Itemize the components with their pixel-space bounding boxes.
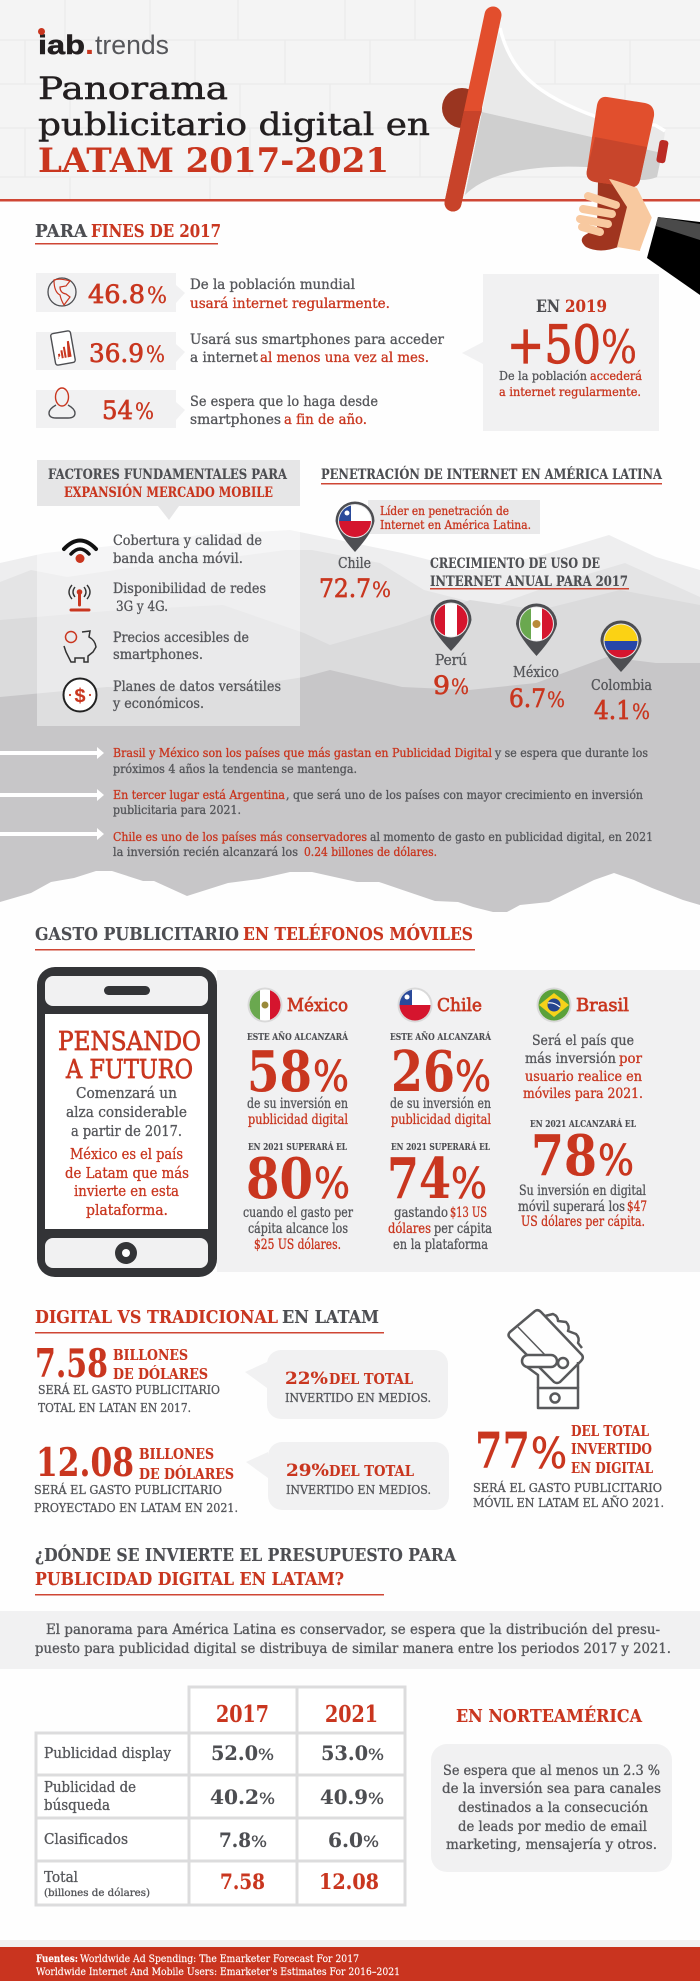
map pin and stat: perú: % <box>451 675 469 699</box>
table: distribución del presupuesto: % <box>258 1745 274 1764</box>
column: chile: Chile <box>437 995 482 1016</box>
stat row: 36.9%: % <box>146 343 165 368</box>
panel: en norteamérica: EN NORTEAMÉRICA <box>456 1704 643 1727</box>
phone: pensando a futuro: de Latam que más <box>65 1164 189 1182</box>
heading: crecimiento de uso: CRECIMIENTO DE USO DE <box>430 556 600 572</box>
table: distribución del presupuesto: Clasificados <box>44 1832 128 1848</box>
panel: factores fundamentales: smartphones. <box>113 647 203 663</box>
table: distribución del presupuesto: Publicidad display <box>44 1746 172 1762</box>
panel: en 2019 <box>462 274 659 431</box>
column: méxico: $25 US dólares. <box>254 1237 341 1253</box>
panel: factores fundamentales: Planes de datos versátiles <box>113 679 281 695</box>
table: distribución del presupuesto: 7.58 <box>220 1869 265 1894</box>
panel: country stats background <box>217 970 700 1272</box>
stat row: 46.8%: 46.8 <box>88 280 145 309</box>
callout: líder en penetración: Líder en penetración de <box>380 503 509 518</box>
stat: 7.58 billones: DE DÓLARES <box>113 1365 208 1383</box>
section heading: digital vs tradicional: DIGITAL VS TRADICIONAL <box>35 1307 278 1328</box>
panel: factores fundamentales: Precios accesibles de <box>113 630 249 646</box>
stat row: 36.9%: 36.9 <box>89 339 144 368</box>
stat: 12.08 billones: BILLONES <box>139 1445 214 1463</box>
icon: hand holding phone <box>508 1310 583 1408</box>
title: Panorama <box>38 71 228 107</box>
column: chile: 74 <box>387 1146 451 1212</box>
map pin and stat: méxico: México <box>513 663 559 681</box>
stat: 77% del total invertido en digital: SERÁ EL GASTO PUBLICITARIO <box>473 1480 662 1495</box>
icon: smartphone with bars <box>50 331 76 365</box>
table: distribución del presupuesto: 52.0 <box>211 1741 258 1765</box>
stat row: 36.9%: Usará sus smartphones para acceder <box>190 332 445 348</box>
stat: chile 72.7% <box>319 554 391 603</box>
table: distribución del presupuesto: 40.2 <box>210 1785 259 1809</box>
stat row: 46.8%: % <box>147 284 167 309</box>
stat: 12.08 billones <box>34 1440 238 1515</box>
stat: 7.58 billones: TOTAL EN LATAN EN 2017. <box>38 1400 191 1415</box>
column: brasil: US dólares per cápita. <box>521 1214 645 1230</box>
map pin and stat: colombia: Colombia <box>591 676 652 694</box>
arrow bullet: brasil y méxico: y se espera que durante los <box>494 746 648 760</box>
panel: en norteamérica <box>431 1704 672 1872</box>
stat row: 54%: % <box>135 400 154 425</box>
panel: en 2019: EN <box>536 297 560 317</box>
panel: factores fundamentales: Cobertura y calidad de <box>113 533 262 549</box>
table: distribución del presupuesto <box>36 1687 405 1905</box>
logo: iab.trends: . <box>85 30 94 60</box>
stat row: 54% <box>36 388 378 428</box>
arrow bullet: brasil y méxico: próximos 4 años la tendencia se mantenga. <box>113 762 357 776</box>
stat: 77% del total invertido en digital: % <box>531 1429 567 1478</box>
stat: 7.58 billones: 7.58 <box>35 1341 108 1387</box>
flag: méxico <box>248 988 282 1022</box>
column: chile: de su inversión en <box>390 1096 491 1112</box>
column: chile: 26 <box>391 1039 455 1105</box>
column: brasil: Será el país que <box>532 1033 634 1049</box>
panel: en 2019: 2019 <box>565 297 607 317</box>
section heading: gasto publicitario <box>35 922 475 950</box>
text band: panorama conservador: El panorama para América Latina es conservador, se espera que la distribución del presu- <box>46 1622 660 1638</box>
column: chile: ESTE AÑO ALCANZARÁ <box>390 1031 491 1043</box>
text band: panorama conservador <box>0 1611 700 1669</box>
panel: en 2019: +50 <box>507 316 601 376</box>
panel: en norteamérica: destinados a la consecución <box>458 1800 648 1816</box>
stat row: 36.9% <box>36 331 445 370</box>
map pin and stat: perú <box>430 600 472 700</box>
panel: factores fundamentales: Disponibilidad de redes <box>113 581 266 597</box>
column: méxico <box>243 988 353 1253</box>
column: chile: publicidad digital <box>391 1112 491 1128</box>
title <box>38 71 430 181</box>
table: distribución del presupuesto: 2021 <box>325 1701 378 1728</box>
panel: factores fundamentales: FACTORES FUNDAMENTALES PARA <box>48 467 287 483</box>
arrow bullet: argentina: , que será uno de los países con mayor crecimiento en inversión <box>286 788 643 802</box>
table: distribución del presupuesto: búsqueda <box>44 1798 110 1814</box>
arrow bullet: chile: 0.24 billones de dólares. <box>304 845 437 859</box>
speech bubble: 29%: DEL TOTAL <box>329 1462 414 1480</box>
arrow bullet: chile: al momento de gasto en publicidad digital, en 2021 <box>370 830 653 844</box>
section heading: dónde se invierte <box>35 1543 457 1596</box>
table: distribución del presupuesto: Publicidad de <box>44 1780 136 1796</box>
column: méxico: % <box>314 1159 350 1208</box>
column: brasil: $47 <box>627 1199 647 1215</box>
table: distribución del presupuesto: 53.0 <box>321 1741 368 1765</box>
column: brasil: usuario realice en <box>525 1069 642 1085</box>
stat: 77% del total invertido en digital: EN DIGITAL <box>571 1460 653 1477</box>
column: méxico: 58 <box>247 1039 312 1105</box>
table: distribución del presupuesto: % <box>363 1832 379 1851</box>
table: distribución del presupuesto: 12.08 <box>319 1869 379 1894</box>
column: chile: en la plataforma <box>393 1237 488 1253</box>
phone: pensando a futuro <box>37 967 217 1277</box>
column: méxico: cápita alcance los <box>248 1221 348 1237</box>
callout: líder en penetración <box>368 500 540 534</box>
stat row: 54%: smartphones <box>190 412 281 428</box>
column: brasil: Brasil <box>576 995 629 1016</box>
icon: person <box>49 388 75 418</box>
mountain background <box>0 530 700 912</box>
speech bubble: 22%: 22% <box>285 1369 328 1389</box>
panel: en norteamérica: de la inversión sea para canales <box>442 1781 661 1797</box>
arrow bullet: chile <box>0 828 653 859</box>
map pin and stat: colombia <box>591 620 652 725</box>
icon: piggy bank <box>64 631 96 662</box>
phone: pensando a futuro: Comenzará un <box>76 1084 177 1102</box>
column: brasil: EN 2021 ALCANZARÁ EL <box>530 1118 636 1130</box>
column: brasil: más inversión <box>525 1051 616 1067</box>
speech bubble: 22%: DEL TOTAL <box>329 1370 413 1388</box>
footer: fuentes: Worldwide Internet And Mobile Users: Emarketer's Estimates For 2016–2021 <box>36 1966 400 1978</box>
stat: 12.08 billones: PROYECTADO EN LATAM EN 2021. <box>34 1500 238 1515</box>
panel: factores fundamentales <box>37 460 300 726</box>
column: méxico: México <box>287 995 348 1016</box>
panel: en 2019: accederá <box>590 368 642 383</box>
phone: pensando a futuro: invierte en esta <box>74 1182 179 1200</box>
column: méxico: publicidad digital <box>248 1112 348 1128</box>
stat row: 54%: a fin de año. <box>284 412 367 428</box>
icon: dollar coin: $ <box>74 686 86 707</box>
phone: pensando a futuro: a partir de 2017. <box>71 1122 182 1140</box>
phone: pensando a futuro: México es el país <box>70 1145 183 1163</box>
arrow bullet: argentina: En tercer lugar está Argentina <box>113 788 285 802</box>
stat row: 54%: Se espera que lo haga desde <box>190 394 378 410</box>
column: brasil: por <box>619 1051 642 1067</box>
speech bubble: 22%: INVERTIDO EN MEDIOS. <box>285 1390 431 1405</box>
stat: 7.58 billones: SERÁ EL GASTO PUBLICITARIO <box>38 1382 220 1397</box>
heading: crecimiento de uso <box>430 556 629 590</box>
column: méxico: % <box>313 1052 349 1101</box>
stat: 77% del total invertido en digital: MÓVIL EN LATAM EL AÑO 2021. <box>473 1494 664 1510</box>
phone: pensando a futuro: A FUTURO <box>65 1055 193 1085</box>
map pin and stat: colombia: 4.1 <box>594 696 631 725</box>
logo: iab.trends: trends <box>95 30 169 60</box>
arrow bullet: chile: la inversión recién alcanzará los <box>113 845 298 859</box>
column: chile: $13 US <box>450 1205 487 1221</box>
panel: factores fundamentales: banda ancha móvil. <box>113 551 243 567</box>
flag: chile <box>398 988 432 1022</box>
column: méxico: de su inversión en <box>247 1096 348 1112</box>
arrow bullet: chile: Chile es uno de los países más conservadores <box>113 830 367 844</box>
icon: dollar coin <box>64 678 96 712</box>
column: brasil: móviles para 2021. <box>523 1086 643 1102</box>
column: chile: per cápita <box>434 1221 492 1237</box>
header background: brick wall <box>0 0 700 202</box>
stat: 12.08 billones: DE DÓLARES <box>139 1465 234 1483</box>
panel: en 2019: De la población <box>499 368 587 383</box>
icon: globe <box>48 278 76 306</box>
stat: 12.08 billones: 12.08 <box>36 1440 134 1486</box>
section heading: gasto publicitario: GASTO PUBLICITARIO <box>35 924 239 945</box>
stat: 77% del total invertido en digital: 77 <box>475 1421 530 1480</box>
column: chile: EN 2021 SUPERARÁ EL <box>391 1141 490 1153</box>
panel: en norteamérica: Se espera que al menos un 2.3 % <box>443 1763 660 1779</box>
speech bubble: 29% <box>246 1442 449 1510</box>
table: distribución del presupuesto: 7.8 <box>219 1828 251 1852</box>
section heading: dónde se invierte: ¿DÓNDE SE INVIERTE EL PRESUPUESTO PARA <box>35 1543 457 1566</box>
table: distribución del presupuesto: % <box>368 1789 384 1808</box>
section heading: gasto publicitario: EN TELÉFONOS MÓVILES <box>243 922 473 945</box>
heading: crecimiento de uso: INTERNET ANUAL PARA 2017 <box>430 574 628 590</box>
column: chile: dólares <box>388 1221 431 1237</box>
column: chile: % <box>451 1159 487 1208</box>
section heading: para fines de 2017 <box>35 222 221 244</box>
flag: brasil <box>536 988 572 1022</box>
table: distribución del presupuesto: (billones de dólares) <box>44 1887 150 1899</box>
column: méxico: EN 2021 SUPERARÁ EL <box>248 1141 347 1153</box>
text band: panorama conservador: puesto para publicidad digital se distribuya de similar manera entre los periodos 2017 y 2021. <box>35 1641 671 1657</box>
table: distribución del presupuesto: % <box>259 1789 275 1808</box>
panel: en 2019: % <box>601 320 637 374</box>
column: brasil: 78 <box>531 1123 597 1189</box>
column: brasil: % <box>598 1136 634 1185</box>
column: méxico: 80 <box>246 1146 313 1212</box>
table: distribución del presupuesto: 40.9 <box>320 1785 368 1809</box>
map pin and stat: méxico: 6.7 <box>509 684 546 713</box>
table: distribución del presupuesto: 2017 <box>216 1701 269 1728</box>
column: brasil <box>518 988 647 1230</box>
table: distribución del presupuesto: % <box>368 1745 384 1764</box>
panel: factores fundamentales: y económicos. <box>112 696 204 712</box>
stat: 77% del total invertido en digital: INVERTIDO <box>571 1441 652 1458</box>
stat row: 54%: 54 <box>102 396 133 425</box>
panel: factores fundamentales: EXPANSIÓN MERCADO MOBILE <box>64 484 273 501</box>
map pin and stat: méxico <box>509 604 565 713</box>
column: méxico: cuando el gasto per <box>243 1205 353 1221</box>
stat row: 46.8% <box>36 273 390 312</box>
section heading: para fines de 2017: FINES DE 2017 <box>91 222 221 242</box>
footer: fuentes <box>0 1940 700 1981</box>
stat row: 36.9%: a internet <box>190 350 259 366</box>
footer: fuentes: Fuentes: <box>36 1953 78 1965</box>
stat: chile 72.7%: % <box>372 578 391 602</box>
phone: pensando a futuro: alza considerable <box>66 1103 187 1121</box>
title: publicitario digital en <box>38 107 430 143</box>
phone: pensando a futuro: plataforma. <box>86 1201 168 1219</box>
column: chile: % <box>455 1052 491 1101</box>
icon: megaphone held by hand <box>442 15 700 295</box>
icon: wifi <box>64 540 96 563</box>
column: chile <box>387 988 492 1253</box>
speech bubble: 29%: 29% <box>286 1461 329 1481</box>
map pin: chile <box>336 502 374 552</box>
arrow bullet: argentina: publicitaria para 2021. <box>113 803 241 817</box>
arrow bullet: brasil y méxico <box>0 746 648 776</box>
column: brasil: móvil superará los <box>518 1199 625 1215</box>
section heading: digital vs tradicional: EN LATAM <box>282 1307 379 1328</box>
icon: antenna <box>69 585 90 610</box>
stat: 7.58 billones <box>35 1341 220 1415</box>
speech bubble: 29%: INVERTIDO EN MEDIOS. <box>286 1482 431 1497</box>
stat: chile 72.7%: 72.7 <box>319 574 371 603</box>
stat: 77% del total invertido en digital: DEL TOTAL <box>571 1423 649 1440</box>
title: LATAM 2017-2021 <box>38 141 389 181</box>
section heading: dónde se invierte: PUBLICIDAD DIGITAL EN LATAM? <box>35 1569 344 1590</box>
stat: chile 72.7%: Chile <box>338 554 371 572</box>
map pin and stat: perú: 9 <box>433 671 450 700</box>
arrow bullet: argentina <box>0 788 643 817</box>
logo: iab.trends: iab <box>38 30 85 60</box>
map pin and stat: méxico: % <box>547 688 565 712</box>
map pin and stat: colombia: % <box>632 700 650 724</box>
table: distribución del presupuesto: 6.0 <box>328 1828 363 1852</box>
stat: 12.08 billones: SERÁ EL GASTO PUBLICITARIO <box>34 1482 222 1497</box>
column: brasil: Su inversión en digital <box>519 1183 646 1199</box>
speech bubble: 22% <box>245 1350 448 1419</box>
footer: fuentes: Worldwide Ad Spending: The Emarketer Forecast For 2017 <box>80 1953 359 1965</box>
panel: en norteamérica: marketing, mensajería y otros. <box>446 1837 657 1853</box>
panel: en 2019: a internet regularmente. <box>499 384 641 399</box>
stat row: 46.8%: usará internet regularmente. <box>190 296 390 312</box>
section heading: para fines de 2017: PARA <box>35 222 87 242</box>
panel: en norteamérica: de leads por medio de email <box>458 1819 647 1835</box>
column: chile: gastando <box>394 1205 448 1221</box>
panel: factores fundamentales: 3G y 4G. <box>116 599 168 615</box>
phone: pensando a futuro: PENSANDO <box>58 1027 201 1057</box>
section heading: digital vs tradicional <box>35 1307 384 1334</box>
map pin and stat: perú: Perú <box>435 651 467 669</box>
table: distribución del presupuesto: % <box>251 1832 267 1851</box>
arrow bullet: brasil y méxico: Brasil y México son los países que más gastan en Publicidad Digital <box>113 746 492 760</box>
stat: 77% del total invertido en digital <box>473 1421 664 1510</box>
table: distribución del presupuesto: Total <box>44 1870 78 1886</box>
stat: 7.58 billones: BILLONES <box>113 1346 188 1364</box>
column: méxico: ESTE AÑO ALCANZARÁ <box>247 1031 348 1043</box>
logo: iab.trends <box>38 28 169 60</box>
callout: líder en penetración: Internet en América Latina. <box>380 517 531 532</box>
stat row: 36.9%: al menos una vez al mes. <box>260 350 429 366</box>
stat row: 46.8%: De la población mundial <box>190 277 355 293</box>
